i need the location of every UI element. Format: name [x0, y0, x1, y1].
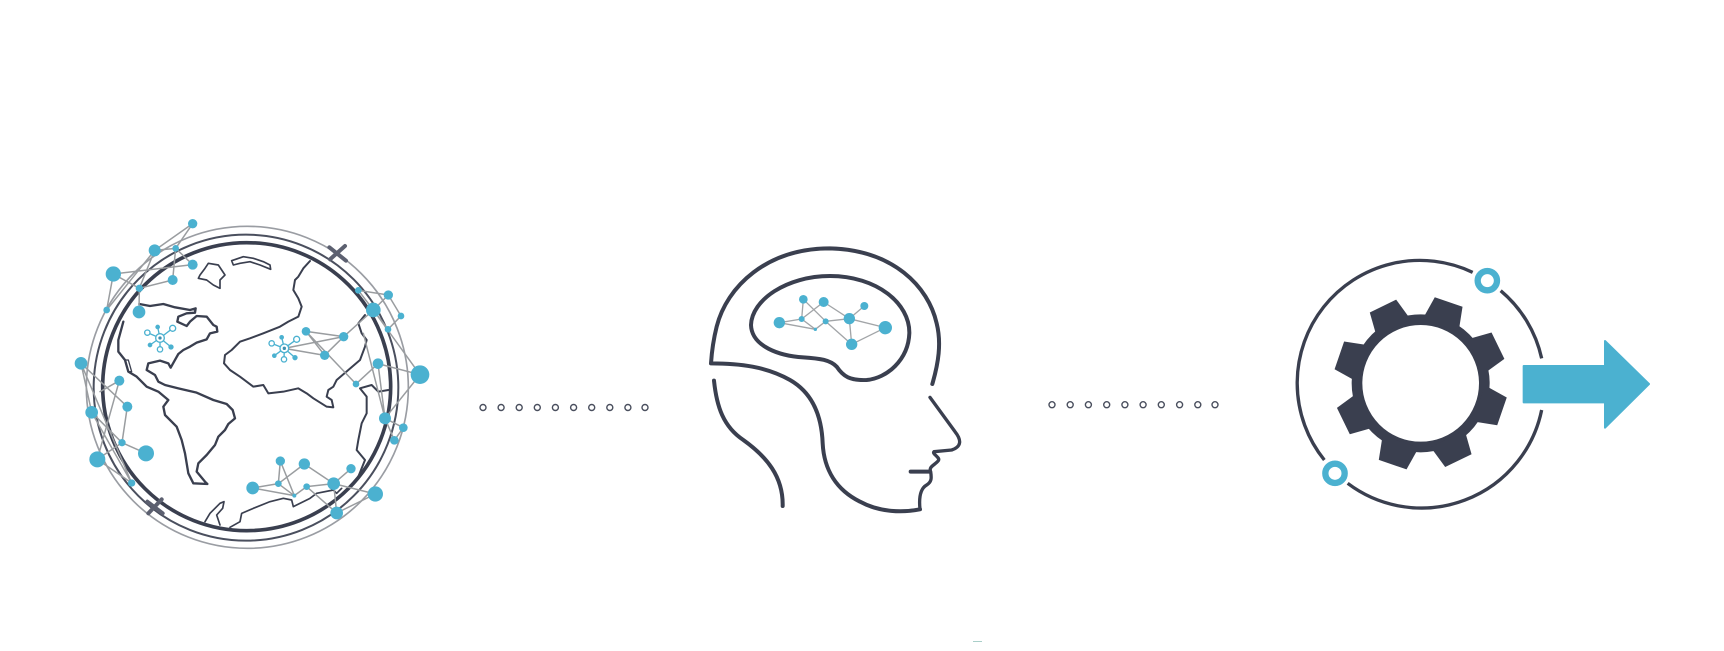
face profile — [920, 397, 960, 509]
network nodes — [75, 219, 429, 519]
brain network edges — [779, 299, 885, 344]
neck line — [714, 381, 783, 506]
network edges — [81, 224, 420, 513]
hub icon: right — [269, 336, 300, 362]
mouth line — [911, 466, 930, 478]
dotted connector: globe to head — [480, 404, 648, 410]
continents — [118, 257, 388, 527]
orbit ring: bottom left — [1325, 464, 1345, 483]
icon: networked globe — [75, 219, 429, 548]
orbit ring: top right — [1478, 271, 1497, 290]
planes on orbit — [147, 246, 346, 513]
arrow — [1524, 341, 1649, 428]
dotted connector: head to gear — [1049, 402, 1218, 408]
hub icon: left — [145, 325, 176, 352]
gear — [1333, 296, 1508, 471]
icon: gear with orbit and arrow — [1297, 260, 1649, 508]
brain outline — [751, 276, 909, 380]
globe rings — [86, 226, 408, 548]
orbit arcs — [1297, 260, 1542, 508]
head outline — [711, 248, 939, 511]
small mark — [973, 641, 982, 642]
icon: head with brain network — [711, 248, 960, 511]
brain network nodes — [774, 295, 892, 350]
